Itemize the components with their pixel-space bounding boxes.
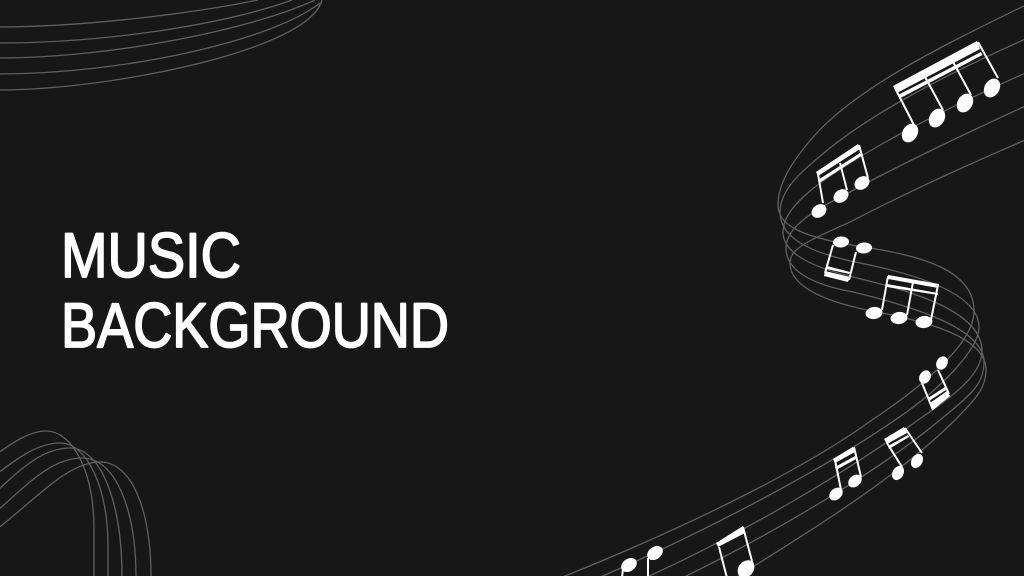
- staff lines: top left: [0, 0, 322, 90]
- note: beamed pair, lower: [827, 447, 864, 503]
- note: three beamed sixteenths, middle: [865, 275, 939, 329]
- staff lines: bottom left: [0, 431, 151, 576]
- note: pair cut by bottom edge: [618, 543, 666, 576]
- title: [61, 221, 449, 361]
- title: BACKGROUND: [61, 291, 449, 361]
- note: inverted beamed pair: [824, 236, 872, 282]
- note: inverted pair, right: [917, 354, 950, 410]
- title: MUSIC: [61, 221, 241, 291]
- note: tilted beamed pair, lower: [884, 427, 926, 482]
- staff lines: main curving staff: [560, 3, 1024, 576]
- note: four beamed sixteenths: [893, 41, 1003, 145]
- note: eighth pair cut by bottom edge: [716, 526, 758, 576]
- note: three beamed sixteenths: [809, 144, 872, 221]
